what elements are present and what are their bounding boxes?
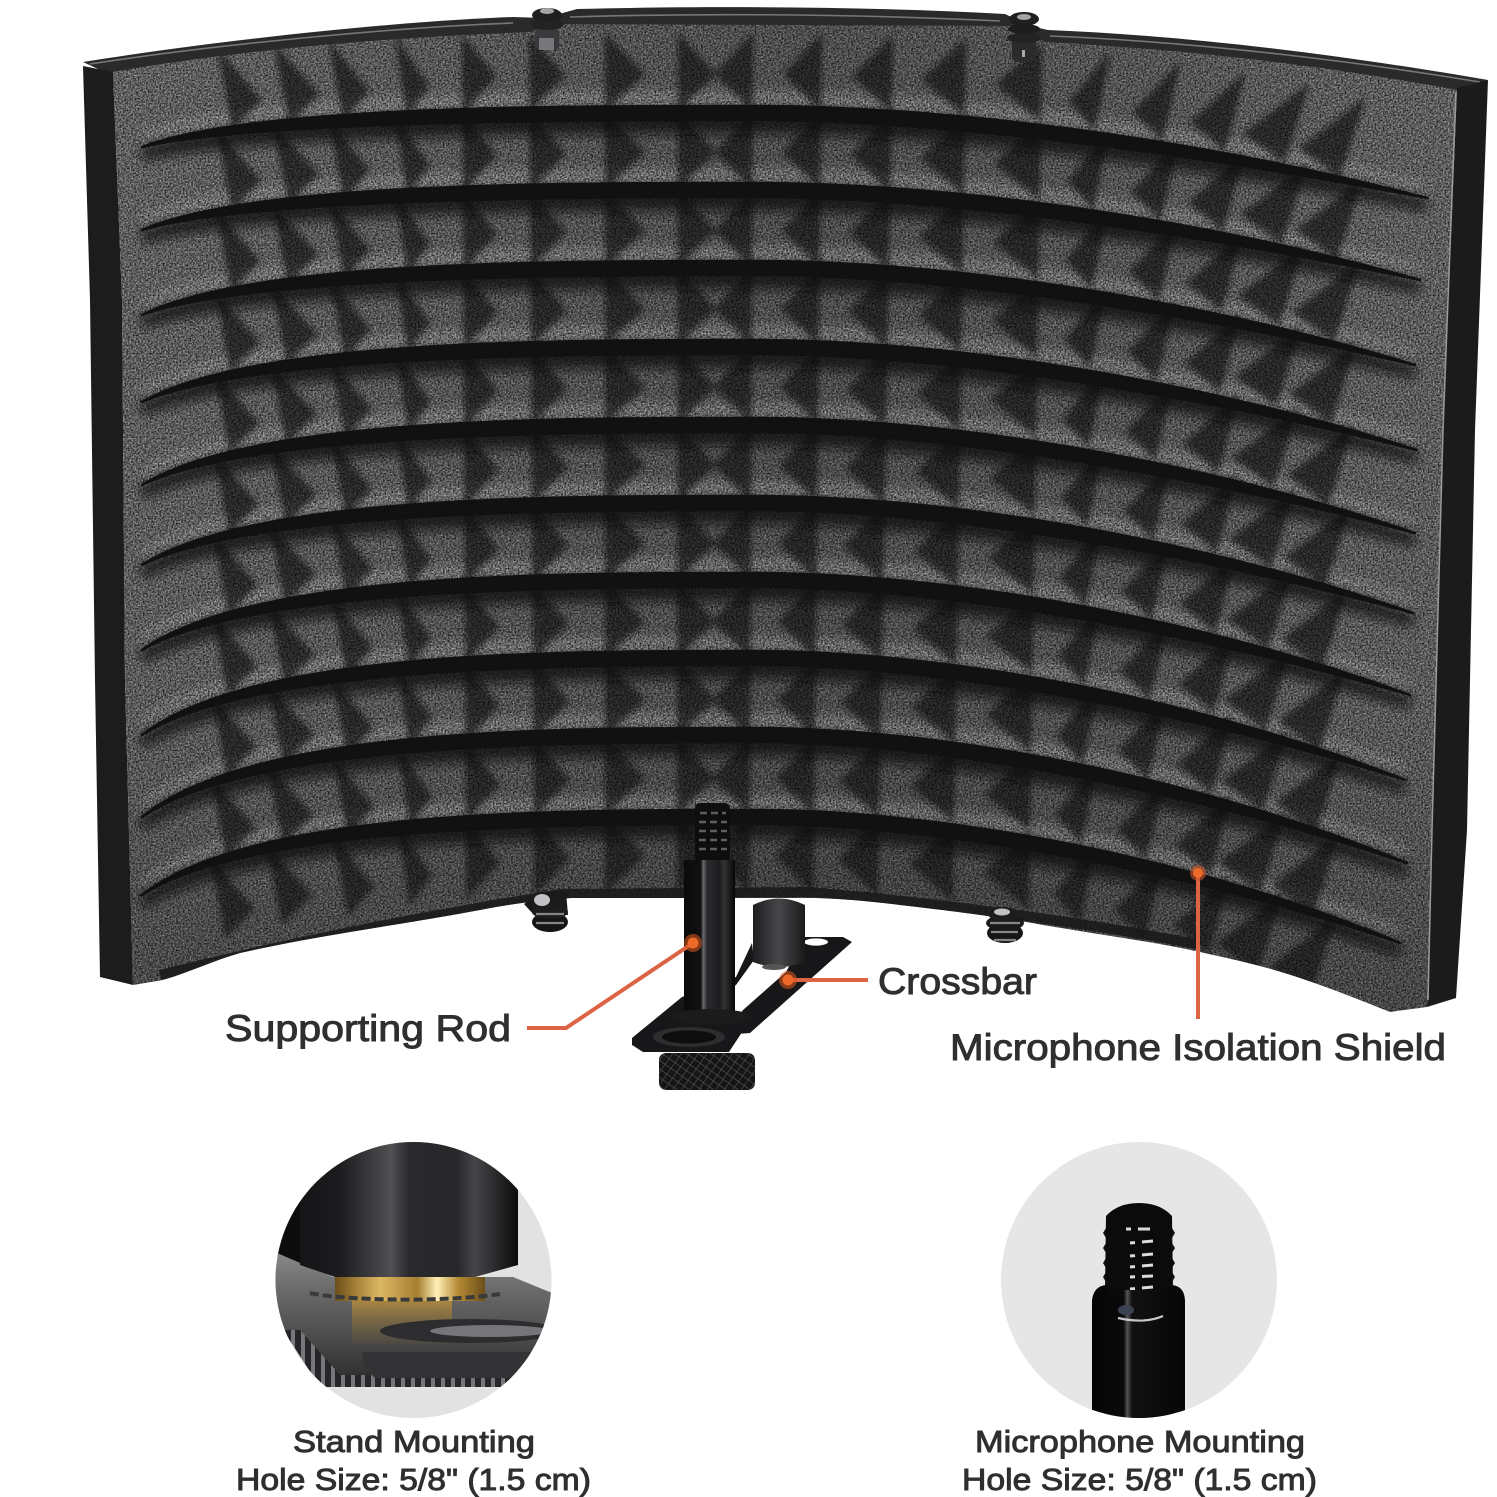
acoustic foam panel bbox=[100, 0, 1480, 1020]
icon: top right screw bbox=[1007, 12, 1041, 62]
callout: microphone isolation shield bbox=[950, 865, 1446, 1068]
dark backing wedge bbox=[278, 1201, 300, 1263]
callout: supporting rod: Supporting Rod bbox=[225, 1008, 511, 1049]
panel: microphone mounting detail circle bbox=[1001, 1142, 1277, 1425]
mounting plate bbox=[270, 1250, 552, 1383]
plate serrated edge bbox=[283, 1330, 513, 1387]
standoff post bbox=[753, 898, 805, 970]
text: stand mounting caption: Hole Size: 5/8" (1.5 cm) bbox=[236, 1462, 591, 1497]
panel: stand mounting detail circle bbox=[270, 1130, 560, 1418]
left metal side strip bbox=[83, 66, 133, 985]
weld edge bbox=[310, 1293, 500, 1300]
crossbar upper rail bbox=[682, 943, 754, 1010]
panel: microphone isolation shield bbox=[83, 0, 1488, 1020]
callout: crossbar: Crossbar bbox=[878, 961, 1037, 1002]
plate lower lip bbox=[362, 1352, 550, 1378]
icon: bottom right screw bbox=[986, 907, 1024, 943]
rod collar and shaft bbox=[1092, 1285, 1185, 1425]
crossbar lower rail bbox=[725, 937, 852, 1035]
threaded tip of rod bbox=[695, 803, 730, 863]
text: microphone mounting caption bbox=[962, 1424, 1317, 1497]
black cylinder bbox=[300, 1130, 518, 1277]
text: stand mounting caption bbox=[236, 1424, 591, 1497]
frame edge highlight bbox=[1428, 92, 1456, 1000]
crossbar base plate bbox=[632, 997, 750, 1052]
groove soft shadows bbox=[142, 114, 1427, 951]
foam surface and pyramid facets bbox=[100, 0, 1480, 1020]
text: microphone mounting caption: Microphone Mounting bbox=[975, 1424, 1305, 1459]
callout: microphone isolation shield: Microphone Isolation Shield bbox=[950, 1027, 1446, 1068]
right metal side strip bbox=[1427, 80, 1488, 1007]
foam bottom edge shadow bbox=[160, 892, 1200, 975]
callout: crossbar bbox=[779, 961, 1037, 1002]
supporting rod body bbox=[670, 860, 752, 1025]
panel: crossbar and supporting rod hardware bbox=[632, 803, 852, 1090]
text: stand mounting caption: Stand Mounting bbox=[293, 1424, 535, 1459]
foam horizontal grooves bbox=[142, 106, 1427, 943]
text: microphone mounting caption: Hole Size: 5/8" (1.5 cm) bbox=[962, 1462, 1317, 1497]
icon: top left screw bbox=[530, 8, 564, 50]
icon: bottom left screw bbox=[524, 892, 568, 932]
knurled thumb wheel bbox=[659, 1053, 755, 1090]
threaded stud bbox=[1103, 1203, 1175, 1290]
brass reflection bbox=[352, 1300, 452, 1344]
callout: supporting rod bbox=[225, 934, 702, 1049]
shield top frame bbox=[83, 7, 1488, 92]
crossbar end hole bbox=[804, 938, 828, 946]
plate oval hole bbox=[380, 1319, 560, 1343]
brass collar bbox=[335, 1277, 485, 1301]
